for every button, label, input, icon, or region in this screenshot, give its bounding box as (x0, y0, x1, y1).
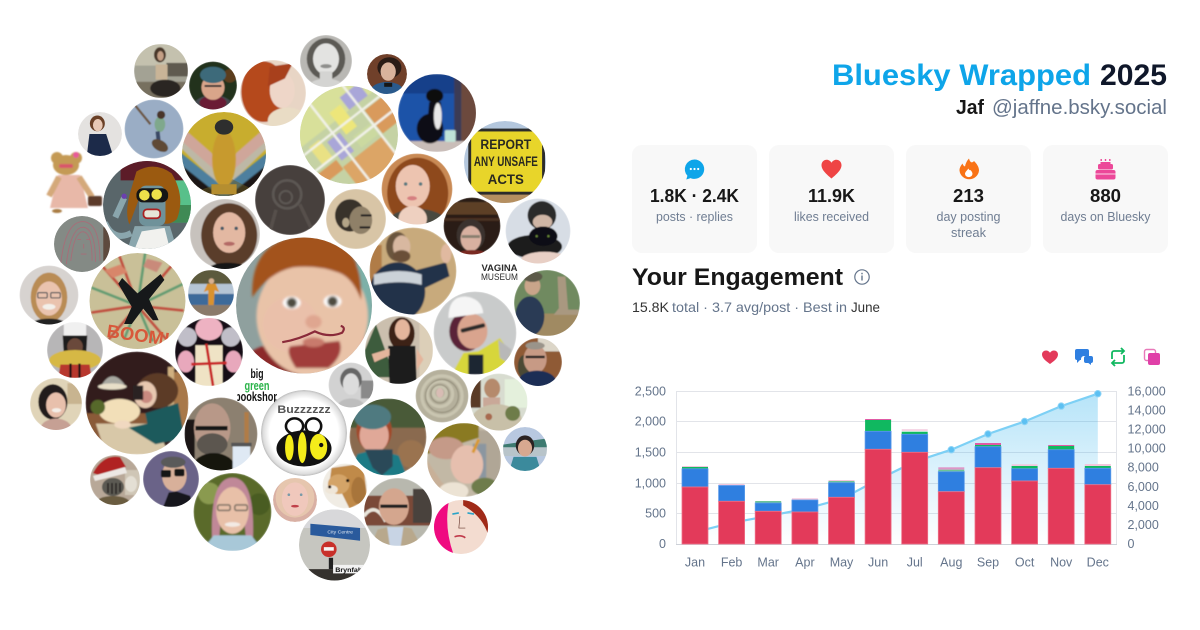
heading: Your Engagement: Your Engagement (632, 264, 843, 291)
panel: days on Bluesky: days on Bluesky (1060, 210, 1151, 224)
avatar: report any unsafe acts sign: ACTS (488, 171, 524, 187)
engagement summary (632, 299, 880, 315)
month labels: Jun (868, 556, 888, 570)
icon: quotes legend (1144, 350, 1160, 365)
right axis labels (1128, 384, 1166, 551)
avatar: woman in black halter by Christmas tree (365, 316, 433, 384)
month labels: Jan (685, 556, 705, 570)
right axis labels: 2,000 (1128, 518, 1159, 532)
month labels: Mar (757, 556, 779, 570)
avatar: Bender cartoon with red hair (103, 161, 191, 249)
panel: days on Bluesky (1043, 145, 1168, 253)
avatar: bearded man in patterned jumper (370, 228, 456, 321)
left axis labels: 2,000 (635, 414, 666, 428)
right axis labels: 14,000 (1128, 404, 1166, 418)
avatar: cycle route road sign: City Centre (327, 530, 353, 535)
right axis labels: 8,000 (1128, 460, 1159, 474)
icon: flame (960, 158, 979, 179)
avatar: person in lifeboat kit (47, 322, 103, 378)
avatar: woman in velvet dress (78, 112, 122, 156)
avatar: pale blonde woman (273, 477, 317, 522)
panel: day posting streak: streak (951, 226, 987, 240)
avatar: report any unsafe acts sign: REPORT (480, 136, 532, 152)
right axis labels: 6,000 (1128, 480, 1159, 494)
left axis labels: 1,500 (635, 446, 666, 460)
title: Bluesky Wrapped (832, 59, 1091, 92)
avatar: hands knitting (427, 423, 501, 500)
avatar: illustrated woman with headphones and cat (86, 352, 188, 454)
month labels: Dec (1087, 556, 1109, 570)
avatar: cycle route road sign: Brynfab (335, 567, 362, 574)
right axis labels: 16,000 (1128, 384, 1166, 398)
avatar: street map (300, 86, 398, 184)
avatar: woman at station, smiling (503, 427, 547, 471)
icon: replies legend (1075, 349, 1093, 365)
avatar: teddy bear in pink outfit (49, 152, 102, 213)
avatar: man beside tree (514, 270, 580, 336)
avatar: coiled wool with small animal (416, 370, 468, 422)
engagement summary: total · 3.7 avg/post · Best in (672, 299, 847, 315)
stacked bar and cumulative line chart (635, 384, 1166, 570)
panel: posts and replies: 1.8K · 2.4K (650, 186, 739, 206)
left axis labels: 0 (659, 537, 666, 551)
month labels: Sep (977, 556, 999, 570)
left axis labels: 2,500 (635, 384, 666, 398)
avatar: woman in teal hat and scarf (350, 398, 426, 476)
icon: info (855, 270, 869, 284)
avatar: woman sitting on bench (134, 44, 188, 98)
panel: day posting streak: 213 (953, 186, 984, 206)
title: 2025 (1100, 59, 1167, 92)
logo: big green bookshop (237, 368, 277, 402)
cumulative area (695, 394, 1098, 544)
avatar: golden dog (322, 464, 368, 508)
month labels: Jul (907, 556, 923, 570)
icon: likes legend (1042, 350, 1058, 364)
logo: Vagina Museum (481, 263, 518, 283)
panel: day posting streak (906, 145, 1031, 253)
avatar: black and white portrait woman (300, 35, 352, 87)
avatar: cycle route road sign (299, 510, 370, 580)
avatar: sketched profile portrait (326, 189, 386, 249)
avatar: Buzzzzzz bee badge (261, 390, 347, 476)
avatar: BOOM comic illustration: BOOM! (106, 320, 171, 350)
avatar: BOOM comic illustration (90, 253, 186, 350)
avatar: bald man in beige suit (364, 478, 432, 546)
icon: speech bubble (685, 159, 704, 179)
avatar: black and white cat by window (398, 74, 477, 152)
left axis labels: 500 (645, 506, 666, 520)
avatar: person in yellow jacket on pier (188, 270, 234, 316)
panel: likes received: likes received (794, 210, 869, 224)
engagement summary: June (851, 299, 880, 315)
month labels: Apr (795, 556, 815, 570)
avatar: toddler with drawn moustache and beard (236, 238, 372, 374)
profile name and handle: @jaffne.bsky.social (992, 97, 1167, 119)
left axis labels: 1,000 (635, 476, 666, 490)
panel: day posting streak: day posting (936, 210, 1001, 224)
month labels: Nov (1050, 556, 1073, 570)
panel: posts and replies (632, 145, 757, 253)
avatar: woman in hard hat and hi-vis vest (434, 292, 516, 374)
profile name and handle: Jaf (956, 97, 984, 119)
avatar: dark grey spiral (255, 165, 325, 235)
avatar cloud (19, 35, 580, 580)
avatar: red haired woman (240, 60, 306, 126)
avatar: figure leaping against sky (124, 100, 184, 158)
avatar: crayon drawing of a face (54, 216, 110, 272)
bars (682, 419, 1111, 544)
icon: heart (822, 160, 842, 178)
month labels (685, 556, 1109, 570)
month labels: Feb (721, 556, 742, 570)
panel: likes received (769, 145, 894, 253)
avatar: Buzzzzzz bee badge: Buzzzzzz (277, 404, 331, 416)
avatar: blonde woman with glasses (19, 266, 78, 330)
chart legend (1042, 348, 1160, 366)
logo: big green bookshop: big (250, 366, 264, 381)
panel: likes received: 11.9K (808, 186, 855, 206)
left axis labels (635, 384, 666, 551)
avatar: black and white woman, small (328, 362, 374, 408)
logo: Vagina Museum: VAGINA (482, 263, 518, 274)
logo: big green bookshop: bookshop (235, 389, 279, 404)
panel: posts and replies: posts · replies (656, 210, 733, 224)
month labels: Aug (940, 556, 962, 570)
avatar: woman with pink hair and glasses (194, 473, 272, 551)
avatar: report any unsafe acts sign: ANY UNSAFE (474, 153, 538, 169)
avatar: woman with dark hair laughing (30, 378, 82, 430)
logo: big green bookshop: green (244, 378, 270, 393)
panel: days on Bluesky: 880 (1090, 186, 1121, 206)
right axis labels: 0 (1128, 537, 1134, 551)
avatar: person holding black cat (506, 198, 570, 267)
cumulative line (695, 390, 1101, 532)
avatar: man with floral tablecloth (470, 374, 528, 436)
avatar: man in blue beanie (189, 62, 237, 110)
avatar: report any unsafe acts sign (464, 121, 546, 203)
avatar: woman with glasses before bookshelf (444, 198, 500, 254)
avatar: pop art woman on magenta (434, 500, 488, 554)
avatar: yellow figure on pride chevrons (182, 112, 266, 196)
right axis labels: 4,000 (1128, 499, 1159, 513)
avatar: bald man with glasses and mug (184, 398, 258, 470)
avatar: man with glasses in navy shirt (514, 338, 562, 386)
avatar: brown haired woman smiling (190, 199, 260, 274)
logo: Vagina Museum: MUSEUM (481, 272, 518, 283)
avatar: pink soaps with ribbon (175, 317, 243, 386)
avatar: person with clerical collar (367, 54, 407, 94)
icon: birthday cake (1096, 159, 1116, 180)
right axis labels: 10,000 (1128, 442, 1166, 456)
icon: reposts legend (1112, 348, 1124, 366)
engagement summary: 15.8K (632, 299, 670, 315)
avatar: man with bold glasses on purple (143, 451, 199, 507)
month labels: Oct (1015, 556, 1035, 570)
right axis labels: 12,000 (1128, 422, 1166, 436)
avatar: Santa hat with Bane mask (90, 455, 140, 510)
avatar: woman with auburn curls (382, 154, 452, 224)
month labels: May (830, 556, 854, 570)
